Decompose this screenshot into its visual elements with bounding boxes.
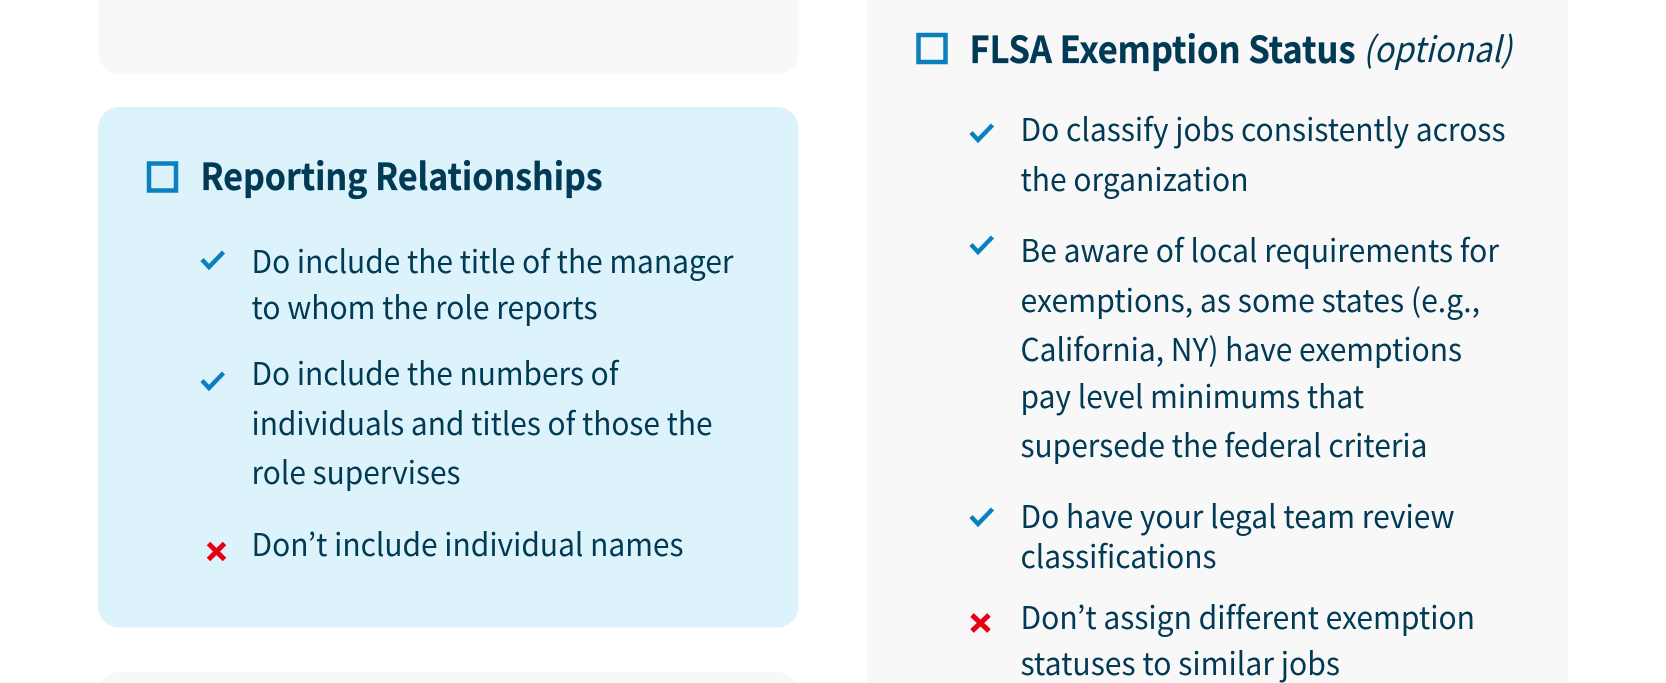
list item: similar jobs: Don’t assign different exemption <box>1020 593 1475 639</box>
list item: numbers and titles supervised <box>202 349 712 494</box>
panel: lower gray card (cropped) <box>98 672 798 683</box>
list item: classify consistently: the organization <box>1020 155 1248 201</box>
list item: manager title <box>202 237 734 329</box>
panel: FLSA exemption status <box>867 0 1568 683</box>
heading: FLSA exemption status: FLSA Exemption Status <box>970 20 1356 74</box>
icon: heading checkbox <box>149 164 176 190</box>
list item: legal review: Do have your legal team review <box>1020 492 1454 538</box>
list item: numbers and titles supervised: Do include the numbers of <box>252 349 620 395</box>
icon: heading checkbox <box>918 35 946 62</box>
heading note: optional: (optional) <box>1363 22 1514 73</box>
list item: local requirements: pay level minimums that <box>1020 372 1364 418</box>
panel: reporting relationships <box>98 107 798 628</box>
list item: manager title: Do include the title of the manager <box>252 237 734 283</box>
list item: local requirements: California, NY) have exemptions <box>1020 325 1462 371</box>
list item: classify consistently: Do classify jobs consistently across <box>1020 105 1506 151</box>
list item: local requirements: Be aware of local requirements for <box>1020 226 1500 272</box>
panel: upper gray card (cropped) <box>98 0 798 74</box>
list item: classify consistently <box>971 105 1506 201</box>
list item: legal review: classifications <box>1020 532 1216 578</box>
list item: numbers and titles supervised: individuals and titles of those the <box>252 399 712 445</box>
list item: no individual names: Don’t include individual names <box>252 520 684 566</box>
list item: numbers and titles supervised: role supervises <box>252 448 460 494</box>
list item: local requirements: supersede the federal criteria <box>1020 421 1428 467</box>
list item: similar jobs <box>972 593 1475 683</box>
list item: manager title: to whom the role reports <box>252 283 598 329</box>
heading: reporting relationships: Reporting Relationships <box>200 147 602 201</box>
list item: local requirements <box>971 226 1500 467</box>
list item: local requirements: exemptions, as some states (e.g., <box>1020 276 1480 322</box>
list item: legal review <box>971 492 1454 578</box>
